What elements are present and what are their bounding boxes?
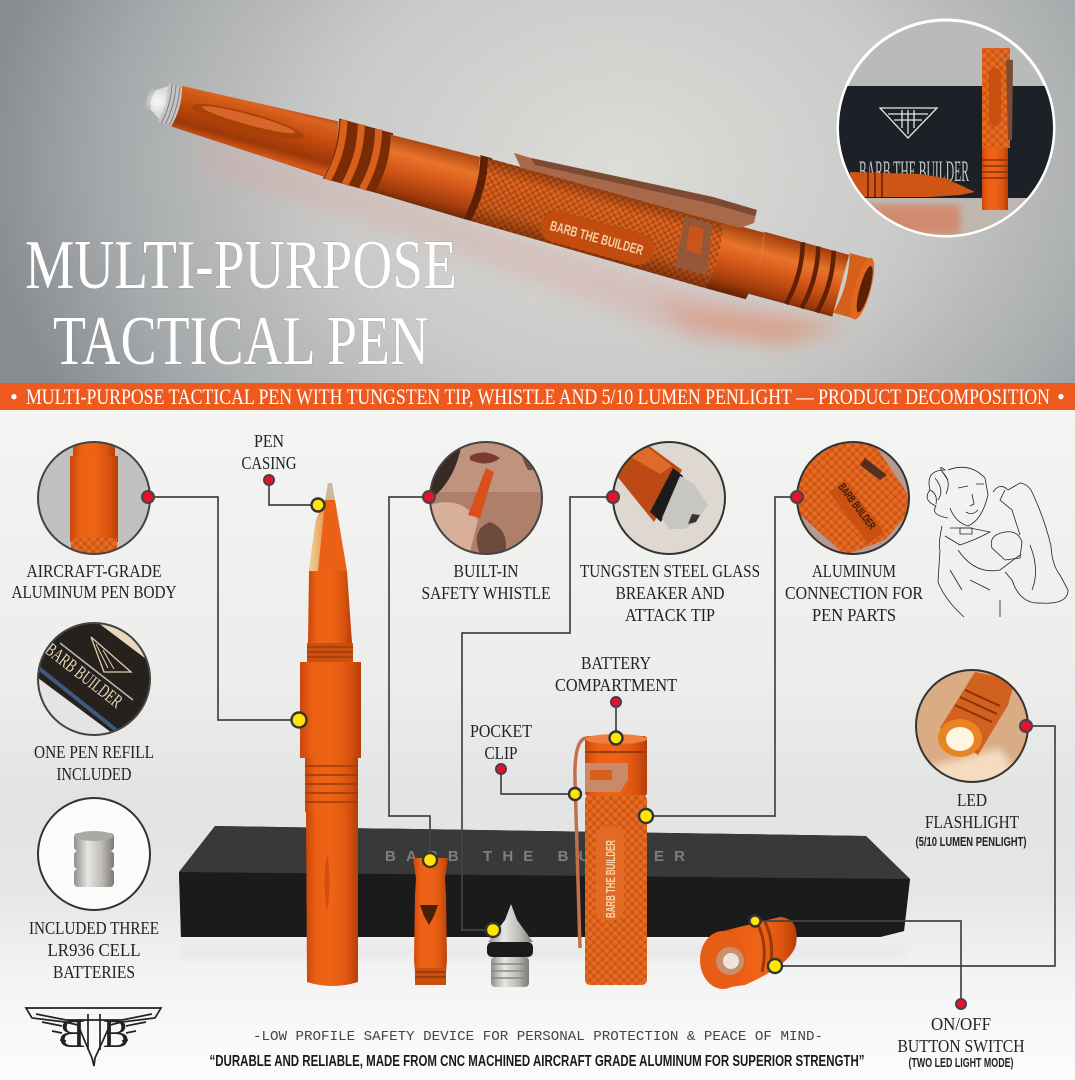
battery compartment body: BARB THE BUILDER [603,840,618,918]
label: pocket clip: CLIP [484,743,518,763]
pen casing [300,483,361,986]
circle: pen refill [30,622,150,736]
label: aluminum connection [785,561,923,625]
label: whistle: BUILT-IN [454,561,519,581]
pen reflection [200,140,860,345]
hero panel [0,0,1075,384]
circle: tungsten tip [612,440,725,554]
label: aluminum pen body: AIRCRAFT-GRADE [26,561,162,581]
marker dots [142,475,1032,1009]
connector lines [148,480,1055,1004]
hero title [25,227,457,380]
circle: LED flashlight [916,670,1028,785]
hero pen photo [139,63,879,330]
label: tungsten tip: ATTACK TIP [625,605,715,625]
orange banner: • [10,384,18,409]
label: tungsten tip [580,561,760,625]
label: pocket clip: POCKET [470,721,532,741]
label: pen casing: PEN [254,431,284,451]
label: on/off switch [898,1014,1024,1070]
label: aluminum pen body: ALUMINUM PEN BODY [12,582,176,602]
logo: winged B emblem: B [103,1011,129,1056]
label: pen refill [34,742,154,784]
label: on/off switch: ON/OFF [931,1014,991,1034]
LED head [700,917,797,989]
pocket clip on hero pen [514,153,757,275]
hero title: MULTI-PURPOSE [25,227,457,304]
label: pen casing [242,431,296,473]
tagline [210,1029,864,1070]
label: battery compartment [555,653,677,695]
label: pen refill: ONE PEN REFILL [34,742,154,762]
hero pen photo: BARB THE BUILDER [548,217,645,258]
circle: aluminum connection [795,440,915,555]
labels [12,431,1026,1070]
label: whistle [422,561,550,603]
label: aluminum connection: ALUMINUM [812,561,896,581]
orange banner: • [1057,384,1065,409]
inset photo: pen and box [838,20,1054,248]
label: aluminum connection: PEN PARTS [812,605,896,625]
circle: whistle in use [430,442,545,554]
label: pen casing: CASING [242,453,296,473]
label: LED flashlight: LED [957,790,987,810]
label: batteries: INCLUDED THREE [29,918,159,938]
label: LED flashlight: (5/10 LUMEN PENLIGHT) [916,835,1026,849]
label: pocket clip [470,721,532,763]
circle: aluminum connection: BARB BUILDER [836,482,878,532]
logo: winged B emblem: B [59,1011,85,1056]
label: pen refill: INCLUDED [56,764,132,784]
label: batteries: BATTERIES [53,962,135,982]
product box: BARB THE BUILDER [385,848,685,865]
label: LED flashlight [916,790,1026,849]
label: whistle: SAFETY WHISTLE [422,583,550,603]
circle: batteries [38,798,150,910]
label: batteries: LR936 CELL [48,940,140,960]
illustration: flexing woman line art [927,467,1068,617]
label: batteries [29,918,159,982]
label: on/off switch: BUTTON SWITCH [898,1036,1024,1056]
attack tip [487,904,533,987]
label: battery compartment: COMPARTMENT [555,675,677,695]
label: tungsten tip: BREAKER AND [616,583,724,603]
label: aluminum pen body [12,561,176,602]
exploded pen parts [300,483,797,989]
label: on/off switch: (TWO LED LIGHT MODE) [908,1056,1014,1070]
label: battery compartment: BATTERY [581,653,651,673]
tagline: -LOW PROFILE SAFETY DEVICE FOR PERSONAL PROTECTION & PEACE OF MIND- [253,1029,823,1045]
label: LED flashlight: FLASHLIGHT [925,812,1019,832]
label: aluminum connection: CONNECTION FOR [785,583,923,603]
circle: pen refill: BARB BUILDER [41,639,127,713]
hero title: TACTICAL PEN [53,303,429,380]
battery compartment body [575,734,647,985]
whistle [413,858,448,985]
logo: winged B emblem [26,1008,161,1066]
circle: pen body [38,442,150,554]
label: tungsten tip: TUNGSTEN STEEL GLASS [580,561,760,581]
product box [179,826,910,960]
